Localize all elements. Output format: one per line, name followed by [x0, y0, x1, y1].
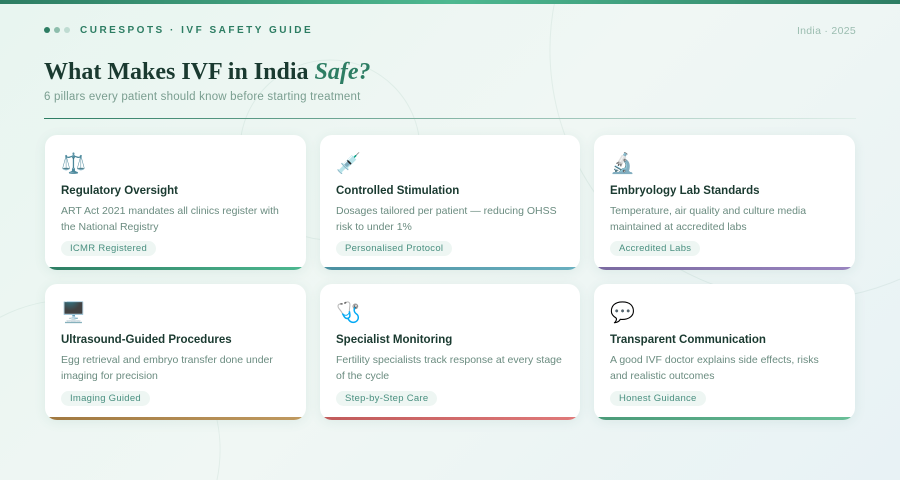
top accent bar	[0, 0, 900, 4]
card description	[61, 205, 279, 233]
accent bar	[45, 417, 306, 420]
tag: ICMR Registered	[70, 243, 147, 254]
card title: Embryology Lab Standards	[610, 185, 760, 197]
tag: Step-by-Step Care	[345, 393, 428, 404]
card title: Ultrasound-Guided Procedures	[61, 334, 232, 346]
card: transparent communication	[594, 284, 855, 420]
card description: A good IVF doctor explains side effects, risks	[610, 354, 819, 366]
brand label: CURESPOTS · IVF SAFETY GUIDE	[80, 25, 313, 36]
card description: of the cycle	[336, 370, 389, 382]
tag: Accredited Labs	[619, 243, 691, 254]
card: ultrasound-guided procedures	[45, 284, 306, 420]
card description: maintained at accredited labs	[610, 221, 747, 233]
header dots	[44, 27, 70, 33]
tag: Personalised Protocol	[345, 243, 443, 254]
tag	[61, 241, 156, 256]
tag	[61, 391, 150, 406]
card description: Dosages tailored per patient — reducing OHSS	[336, 205, 557, 217]
card description: and realistic outcomes	[610, 370, 714, 382]
card description: ART Act 2021 mandates all clinics register with	[61, 205, 279, 217]
region and year: India · 2025	[797, 25, 856, 37]
card description: Temperature, air quality and culture media	[610, 205, 806, 217]
card title: Transparent Communication	[610, 334, 766, 346]
card description	[61, 354, 273, 382]
card title: Specialist Monitoring	[336, 334, 452, 346]
accent bar	[320, 417, 580, 420]
accent bar	[320, 267, 580, 270]
icon: microscope: 🔬	[610, 151, 635, 175]
card description: imaging for precision	[61, 370, 158, 382]
tag	[336, 391, 437, 406]
icon: stethoscope: 🩺	[336, 300, 361, 324]
tag	[336, 241, 452, 256]
icon: monitor: 🖥️	[61, 300, 86, 324]
title: What Makes IVF in India Safe?	[44, 59, 370, 85]
card description: risk to under 1%	[336, 221, 412, 233]
accent bar	[594, 267, 855, 270]
icon: scales: ⚖️	[61, 151, 86, 175]
tag	[610, 241, 700, 256]
card description: the National Registry	[61, 221, 158, 233]
header divider	[44, 118, 856, 119]
tag: Imaging Guided	[70, 393, 141, 404]
tag	[610, 391, 706, 406]
subtitle: 6 pillars every patient should know before starting treatment	[44, 91, 360, 103]
card title: Controlled Stimulation	[336, 185, 459, 197]
card description	[610, 354, 819, 382]
accent bar	[594, 417, 855, 420]
card: specialist monitoring	[320, 284, 580, 420]
icon: speech bubble: 💬	[610, 300, 635, 324]
card: regulatory oversight	[45, 135, 306, 270]
card description	[336, 354, 562, 382]
card: embryology lab standards	[594, 135, 855, 270]
card description: Fertility specialists track response at every stage	[336, 354, 562, 366]
card: controlled stimulation	[320, 135, 580, 270]
card description	[610, 205, 806, 233]
icon: syringe: 💉	[336, 151, 361, 175]
tag: Honest Guidance	[619, 393, 697, 404]
card title: Regulatory Oversight	[61, 185, 178, 197]
card description	[336, 205, 557, 233]
accent bar	[45, 267, 306, 270]
card description: Egg retrieval and embryo transfer done under	[61, 354, 273, 366]
